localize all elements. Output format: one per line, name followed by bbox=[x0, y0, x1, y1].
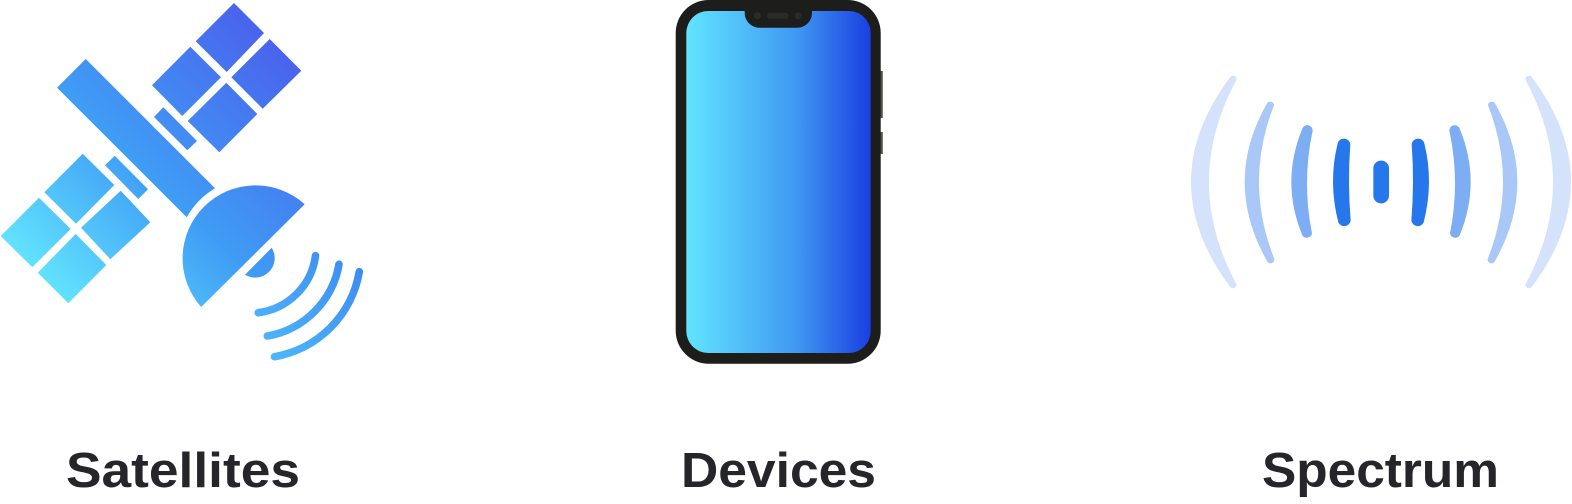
left arcs bbox=[1191, 76, 1351, 288]
satellite body bbox=[57, 59, 215, 217]
signal waves bbox=[258, 256, 359, 357]
label: Devices: Devices bbox=[681, 444, 876, 498]
side buttons bbox=[880, 71, 883, 154]
icon: smartphone bbox=[676, 0, 883, 364]
satellite dish bbox=[183, 185, 305, 307]
phone screen bbox=[686, 11, 871, 353]
label: Spectrum: Spectrum bbox=[1262, 444, 1499, 498]
phone frame bbox=[676, 0, 881, 364]
icon: satellite bbox=[1, 3, 359, 357]
lower solar panel bbox=[1, 154, 150, 303]
centre bar bbox=[1373, 161, 1389, 203]
notch sensors bbox=[754, 12, 802, 19]
notch bbox=[745, 11, 812, 28]
icon: spectrum waves bbox=[1191, 76, 1571, 288]
right arcs bbox=[1411, 76, 1571, 288]
upper solar panel bbox=[152, 3, 301, 152]
label: Satellites: Satellites bbox=[66, 444, 300, 498]
